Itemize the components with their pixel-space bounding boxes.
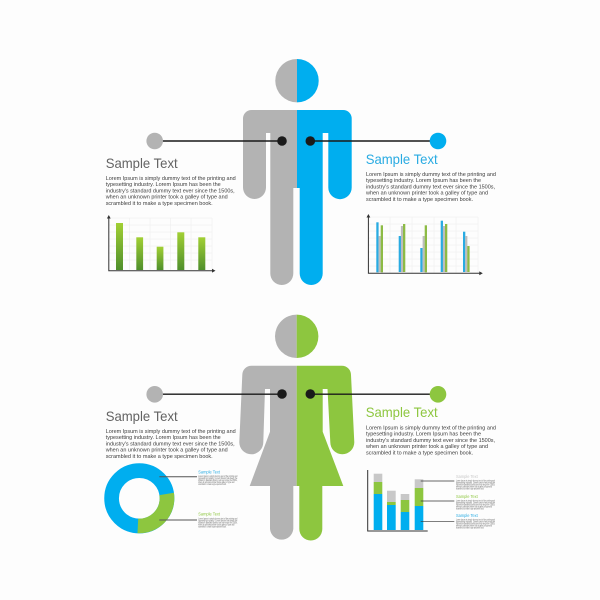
stacked legend: grey: typesetting industry. Lorem Ipsum has been the <box>456 482 496 484</box>
text block: woman left: Lorem Ipsum is simply dummy text of the printing and <box>106 429 236 435</box>
stacked legend: grey: industry's standard dummy text ever since the 1500s, <box>456 484 495 486</box>
text block: man right: scrambled it to make a type specimen book. <box>366 197 473 203</box>
stacked legend: grey <box>456 474 496 490</box>
stacked legend: blue: scrambled it to make a type specimen book. <box>456 526 484 530</box>
text block: man left <box>105 176 236 207</box>
woman figure <box>239 315 354 540</box>
donut legend: green: when an unknown printer took a galley of type and <box>198 524 235 526</box>
heading: man right: Sample Text <box>366 151 438 167</box>
donut legend: blue: industry's standard dummy text ever since the 1500s, <box>198 479 238 482</box>
donut legend: blue <box>198 470 238 486</box>
woman body grey half <box>239 366 297 540</box>
donut legend: green: industry's standard dummy text ever since the 1500s, <box>198 522 238 524</box>
donut legend: blue: Sample Text <box>198 470 221 474</box>
stacked legend: blue <box>456 513 496 530</box>
text block: woman left: industry's standard dummy text ever since the 1500s, <box>106 441 235 447</box>
stacked legend: blue: industry's standard dummy text ever since the 1500s, <box>456 522 495 526</box>
donut legend: blue: scrambled it to make a type specimen book. <box>198 483 227 486</box>
donut legend: green: Sample Text <box>198 512 221 516</box>
stacked legend: green: Sample Text <box>456 494 478 499</box>
donut legend: blue: when an unknown printer took a galley of type and <box>198 481 235 484</box>
text block: man right: industry's standard dummy text ever since the 1500s, <box>366 184 495 190</box>
text block: man left: industry's standard dummy text ever since the 1500s, <box>106 188 235 194</box>
text block: man right: when an unknown printer took a galley of type and <box>365 191 488 197</box>
stacked legend: green: Lorem Ipsum is simply dummy text of the printing and <box>456 500 496 502</box>
stacked legend: grey: Lorem Ipsum is simply dummy text of the printing and <box>456 480 496 482</box>
text block: man right: typesetting industry. Lorem Ipsum has been the <box>366 178 481 184</box>
text block: woman left: scrambled it to make a type specimen book. <box>106 454 213 460</box>
text block: man left: typesetting industry. Lorem Ipsum has been the <box>106 182 221 188</box>
bar chart: man left <box>107 215 216 273</box>
text block: man left: scrambled it to make a type specimen book. <box>106 201 213 207</box>
stacked legend: blue: when an unknown printer took a galley of type and <box>456 524 492 528</box>
stacked legend: green: scrambled it to make a type specimen book. <box>456 508 484 510</box>
stacked legend: green: typesetting industry. Lorem Ipsum has been the <box>456 502 496 504</box>
text block: woman right: Lorem Ipsum is simply dummy text of the printing and <box>366 426 496 432</box>
text block: woman left: typesetting industry. Lorem Ipsum has been the <box>106 435 221 441</box>
donut legend: green: scrambled it to make a type specimen book. <box>198 526 227 528</box>
text block: woman right: typesetting industry. Lorem Ipsum has been the <box>366 432 481 438</box>
man body blue half <box>297 110 352 285</box>
stacked legend: grey: Sample Text <box>456 474 478 479</box>
donut legend: green <box>198 512 238 528</box>
donut legend: blue: Lorem Ipsum is simply dummy text of the printing and <box>198 475 238 478</box>
donut chart <box>112 471 174 533</box>
stacked legend: blue: Lorem Ipsum is simply dummy text of the printing and <box>456 518 496 522</box>
text block: woman right: industry's standard dummy text ever since the 1500s, <box>366 438 495 444</box>
heading: woman right: Sample Text <box>366 404 438 420</box>
stacked legend: blue: typesetting industry. Lorem Ipsum has been the <box>456 520 496 524</box>
heading: woman left: Sample Text <box>106 408 178 424</box>
bar chart: man right <box>366 214 483 275</box>
man head <box>275 59 319 102</box>
woman head <box>275 315 318 358</box>
text block: woman right: scrambled it to make a type specimen book. <box>366 450 473 456</box>
stacked legend: grey: when an unknown printer took a galley of type and <box>456 486 492 488</box>
text block: woman left: when an unknown printer took a galley of type and <box>105 448 228 454</box>
woman connector left <box>146 386 287 403</box>
heading: man left: Sample Text <box>106 155 178 171</box>
woman connector right <box>306 386 446 403</box>
stacked chart leader lines <box>421 481 454 522</box>
stacked legend: grey: scrambled it to make a type specimen book. <box>456 488 484 490</box>
text block: man left: Lorem Ipsum is simply dummy text of the printing and <box>106 176 236 182</box>
text block: man left: when an unknown printer took a galley of type and <box>105 195 228 201</box>
text block: man right <box>365 172 496 203</box>
donut legend: green: Lorem Ipsum is simply dummy text of the printing and <box>198 518 238 520</box>
man body grey half <box>243 110 297 285</box>
stacked bar chart <box>368 470 428 531</box>
man connector left <box>146 133 287 149</box>
donut leader lines <box>159 477 197 520</box>
stacked legend: green: when an unknown printer took a galley of type and <box>456 506 492 508</box>
man connector right <box>306 133 446 149</box>
donut legend: blue: typesetting industry. Lorem Ipsum has been the <box>198 477 238 480</box>
text block: woman right <box>365 426 496 456</box>
stacked legend: blue: Sample Text <box>456 513 478 518</box>
text block: man right: Lorem Ipsum is simply dummy text of the printing and <box>366 172 496 178</box>
woman body green half <box>297 366 354 540</box>
stacked legend: green: industry's standard dummy text ever since the 1500s, <box>456 504 495 506</box>
text block: woman left <box>105 429 236 460</box>
man figure <box>243 59 352 285</box>
text block: woman right: when an unknown printer took a galley of type and <box>365 444 488 450</box>
stacked legend: green <box>456 494 496 510</box>
donut legend: green: typesetting industry. Lorem Ipsum has been the <box>198 520 238 522</box>
